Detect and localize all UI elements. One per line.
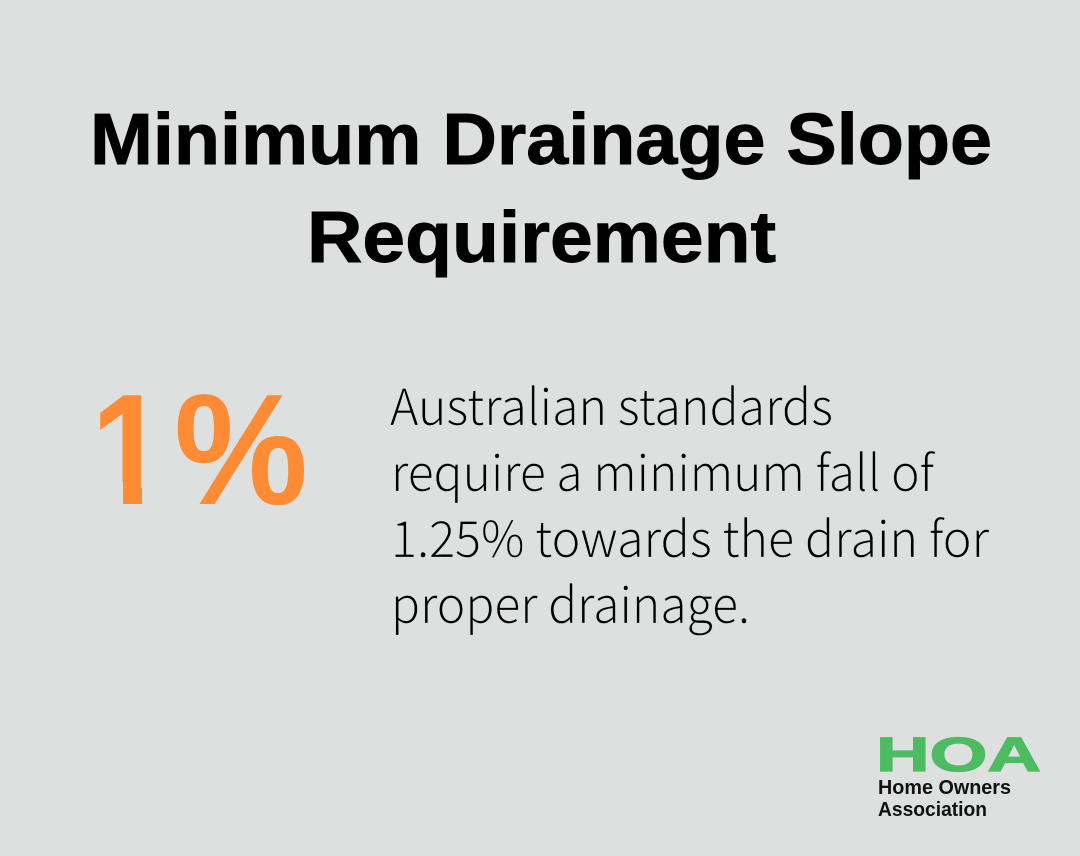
title: Requirement (307, 198, 776, 278)
description text: proper drainage. (391, 566, 750, 638)
logo: Home Owners Association (876, 729, 1041, 821)
title (90, 100, 992, 278)
big stat: 1%: 1 (91, 362, 166, 538)
description text: Australian standards (390, 368, 833, 440)
title: Minimum Drainage Slope (90, 100, 992, 180)
logo: Home Owners Association: Association (878, 799, 987, 821)
logo: Home Owners Association: Home Owners (878, 777, 1011, 799)
description text: 1.25% towards the drain for (391, 500, 990, 572)
description text: require a minimum fall of (391, 434, 936, 506)
big stat: 1% (100, 394, 304, 506)
description text (390, 368, 990, 638)
big stat: 1%: % (174, 362, 308, 538)
logo: Home Owners Association: HOA (876, 729, 1041, 782)
